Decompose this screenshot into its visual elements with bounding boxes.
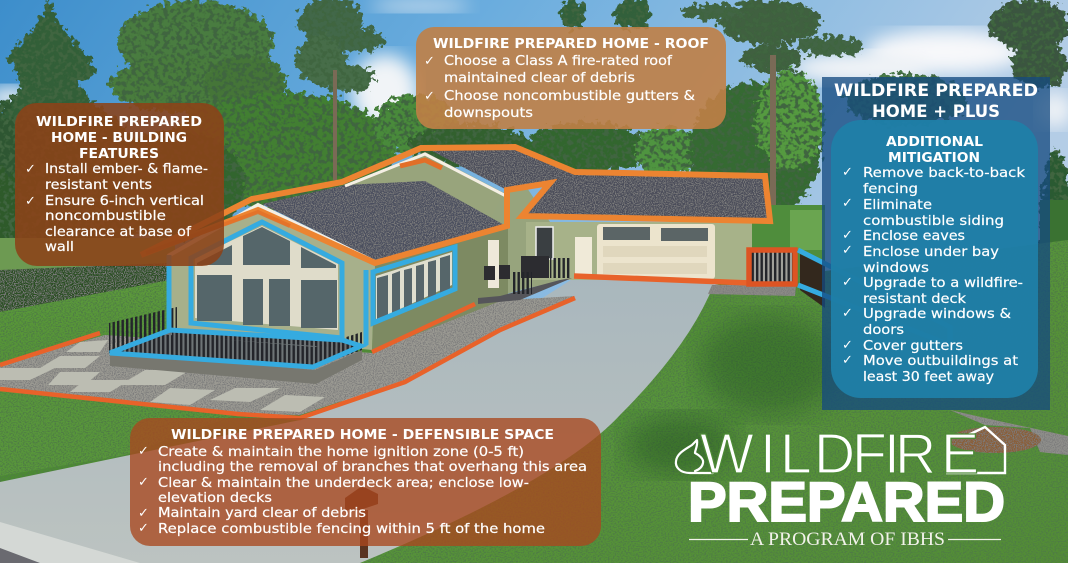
blue window outlines	[110, 222, 455, 367]
subheading: additional mitigation: MITIGATION	[888, 151, 980, 166]
list: additional mitigation: Upgrade to a wildfire-	[863, 276, 1023, 291]
list: roof: Choose noncombustible gutters &	[444, 89, 696, 104]
list: building features: ✓	[25, 194, 36, 209]
garage wall panel	[526, 222, 752, 280]
upper roof	[430, 150, 768, 220]
list: defensible space: ✓	[138, 444, 149, 459]
mulch bed	[949, 427, 1041, 453]
tagline rules	[689, 538, 1001, 540]
panel: roof	[416, 27, 726, 129]
list: building features: noncombustible	[45, 209, 166, 224]
left lawn	[0, 280, 300, 490]
list: building features	[25, 162, 208, 255]
list: defensible space: Maintain yard clear of debris	[158, 506, 366, 521]
wordmark: prepared: PREPARED	[688, 470, 1005, 533]
list: additional mitigation: ✓	[842, 338, 853, 353]
lower left lawn	[0, 390, 238, 476]
fence near garage	[750, 251, 794, 283]
list: defensible space: elevation decks	[158, 491, 272, 506]
orange roof outline	[141, 147, 770, 263]
rear side wall	[480, 185, 752, 302]
hedge	[0, 263, 170, 312]
gable window glass	[197, 227, 337, 328]
list: additional mitigation: ✓	[842, 353, 853, 368]
list: additional mitigation: ✓	[842, 165, 853, 180]
gable face	[167, 205, 375, 350]
gravel pad	[0, 296, 575, 415]
list: defensible space: Replace combustible fencing within 5 ft of the home	[158, 522, 545, 537]
background trees	[0, 0, 1068, 330]
list: additional mitigation: combustible siding	[863, 214, 1004, 229]
gravel driveway edge	[708, 285, 796, 296]
deck floor	[110, 330, 361, 367]
list: additional mitigation: Cover gutters	[863, 339, 963, 354]
front roof	[262, 181, 506, 260]
heading: home plus: WILDFIRE PREPARED	[834, 81, 1038, 101]
lawn shadow foreground	[625, 415, 735, 475]
list: additional mitigation: Move outbuildings at	[863, 354, 1018, 369]
list: building features: Install ember- & flame-	[45, 162, 208, 177]
sky background	[0, 0, 1068, 300]
list: additional mitigation: ✓	[842, 228, 853, 243]
entry door	[488, 240, 499, 288]
icon: flame	[676, 440, 713, 473]
list: building features: wall	[45, 240, 74, 255]
list: additional mitigation: windows	[863, 261, 929, 276]
tree trunks	[333, 55, 776, 244]
list: roof	[424, 54, 696, 121]
wordmark: wildfire: WILDFIRE	[700, 422, 979, 486]
list: additional mitigation: ✓	[842, 275, 853, 290]
heading: building features: WILDFIRE PREPARED	[36, 115, 202, 130]
tagline: A PROGRAM OF IBHS	[750, 529, 945, 550]
heading: building features: HOME - BUILDING	[51, 131, 187, 146]
list: additional mitigation: Eliminate	[863, 198, 932, 213]
front side wall	[372, 225, 508, 352]
sidewalk curb	[0, 522, 140, 563]
side deck railing	[484, 256, 570, 294]
icon: house outline	[946, 427, 1005, 473]
panel: home plus	[822, 77, 1050, 410]
list: additional mitigation: fencing	[863, 182, 918, 197]
back gable wall	[345, 152, 508, 228]
list: roof: ✓	[424, 54, 435, 69]
subheading: additional mitigation	[886, 135, 983, 166]
list: building features: ✓	[25, 162, 36, 177]
list: building features: clearance at base of	[45, 225, 191, 240]
list: defensible space: ✓	[138, 521, 149, 536]
mailbox	[345, 486, 378, 558]
orange eave highlight	[400, 160, 442, 168]
panel: building features	[15, 103, 224, 266]
heading: home plus	[834, 81, 1038, 122]
list: defensible space: ✓	[138, 475, 149, 490]
gable fascia	[168, 205, 375, 262]
blue fence outline	[798, 250, 950, 345]
subheading: additional mitigation: ADDITIONAL	[886, 135, 983, 150]
far lawn	[0, 200, 1068, 300]
garage door panels	[603, 246, 707, 274]
list: additional mitigation: resistant deck	[863, 292, 966, 307]
panel: additional mitigation	[831, 120, 1038, 398]
list: additional mitigation: ✓	[842, 196, 853, 211]
orange ground outline	[0, 250, 795, 418]
list: roof: downspouts	[444, 106, 533, 121]
stepping stones	[0, 340, 325, 412]
heading: home plus: HOME + PLUS	[872, 102, 1000, 122]
side windows	[376, 252, 452, 320]
list: building features: resistant vents	[45, 178, 152, 193]
back gable fascia	[345, 154, 506, 196]
right lawn	[270, 240, 1068, 563]
driveway	[0, 278, 714, 563]
list: additional mitigation: ✓	[842, 306, 853, 321]
logo: Wildfire Prepared	[676, 422, 1005, 550]
heading: defensible space: WILDFIRE PREPARED HOME - DEFENSIBLE SPACE	[171, 428, 554, 443]
gable window frames	[195, 226, 338, 330]
list: additional mitigation: ✓	[842, 243, 853, 258]
list: defensible space	[138, 444, 587, 537]
gravel border	[950, 410, 1068, 455]
garage door	[597, 224, 715, 279]
list: defensible space: Create & maintain the home ignition zone (0-5 ft)	[158, 445, 524, 460]
list: defensible space: ✓	[138, 506, 149, 521]
list: additional mitigation: Remove back-to-back	[863, 166, 1025, 181]
heading: building features: FEATURES	[79, 147, 159, 162]
panel: defensible space	[130, 418, 601, 546]
list: additional mitigation: Enclose under bay	[863, 245, 999, 260]
list: additional mitigation: Enclose eaves	[863, 229, 965, 244]
lawn shadow	[700, 315, 840, 415]
orange gable highlight	[146, 212, 290, 253]
heading: building features	[36, 115, 202, 162]
small window	[536, 227, 553, 259]
list: additional mitigation: least 30 feet away	[863, 370, 994, 385]
list: defensible space: including the removal of branches that overhang this area	[158, 460, 587, 475]
list: additional mitigation	[842, 165, 1025, 385]
list: roof: ✓	[424, 89, 435, 104]
list: roof: Choose a Class A fire-rated roof	[444, 54, 672, 69]
deck rail	[109, 307, 362, 367]
fence far run	[800, 254, 825, 308]
fir tree left	[0, 0, 108, 120]
heading: roof: WILDFIRE PREPARED HOME - ROOF	[433, 37, 709, 52]
list: building features: Ensure 6-inch vertical	[45, 194, 204, 209]
house	[109, 150, 768, 384]
list: additional mitigation: doors	[863, 323, 904, 338]
deck base	[110, 350, 362, 384]
list: additional mitigation: Upgrade windows &	[863, 307, 1012, 322]
list: defensible space: Clear & maintain the underdeck area; enclose low-	[158, 476, 529, 491]
side deck	[478, 278, 572, 304]
list: roof: maintained clear of debris	[444, 71, 635, 86]
side door	[575, 237, 592, 274]
garage door windows	[603, 227, 708, 241]
